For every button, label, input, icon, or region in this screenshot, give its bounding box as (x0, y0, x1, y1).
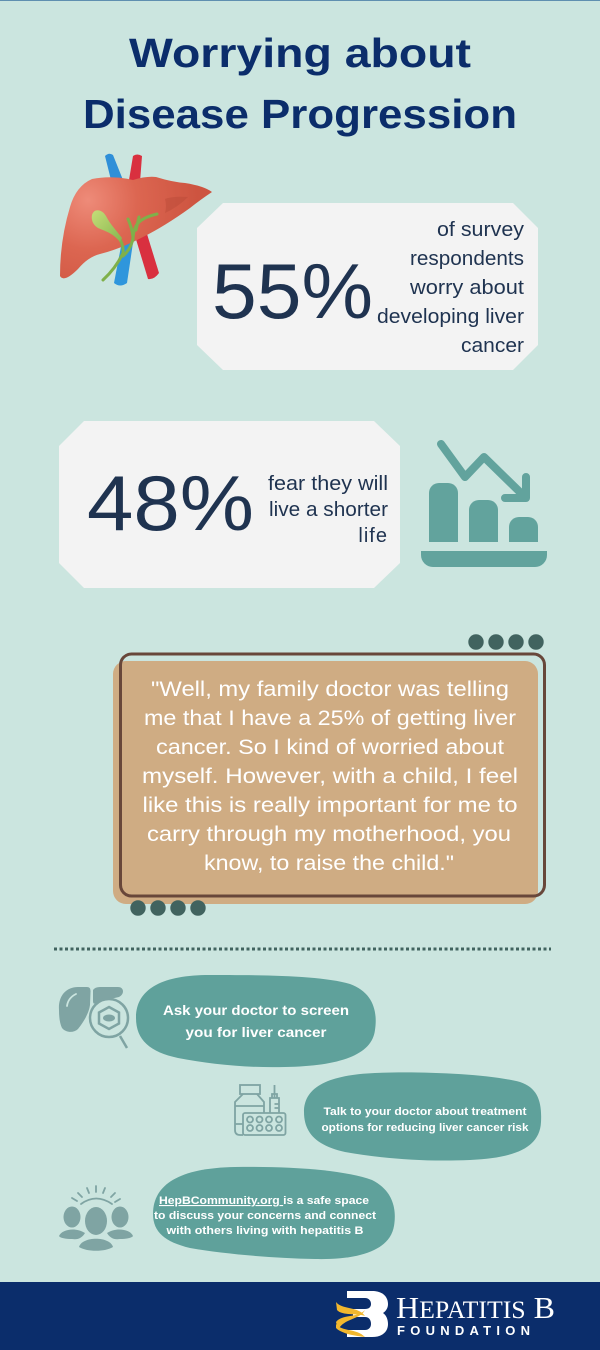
55% description: worry about (409, 277, 524, 299)
quote text: myself. However, with a child, I feel (142, 765, 518, 788)
panel: patient quote (113, 634, 544, 916)
logo: Hepatitis B Foundation: HEPATITIS B (396, 1290, 555, 1325)
title: Disease Progression (83, 91, 517, 137)
bubble: screening: Ask your doctor to screen (163, 1003, 349, 1018)
55% description: of survey (437, 219, 524, 241)
48% description (268, 473, 388, 547)
48% description: fear they will (268, 473, 388, 495)
quote text: carry through my motherhood, you (147, 823, 511, 846)
bubble: community (153, 1167, 395, 1259)
icon: liver with magnifier (59, 987, 128, 1048)
55% description: developing liver (377, 306, 524, 328)
icon: community group (59, 1186, 133, 1251)
title (83, 30, 517, 137)
bubble: community: with others living with hepatitis B (165, 1225, 364, 1237)
footer band (0, 1282, 600, 1350)
48% description: life (358, 525, 388, 547)
quote text (142, 678, 518, 875)
dots: bottom left (130, 900, 206, 916)
quote text: "Well, my family doctor was telling (151, 678, 509, 701)
48% description: live a shorter (269, 499, 388, 521)
logo: Hepatitis B Foundation (336, 1290, 555, 1338)
icon: medication (235, 1085, 286, 1135)
quote box outline (120, 654, 544, 896)
55% description: cancer (461, 335, 524, 357)
bubble: community: to discuss your concerns and connect (154, 1210, 376, 1222)
quote box fill (113, 661, 538, 904)
48% figure: 48% (87, 459, 254, 547)
bubble: treatment (304, 1072, 541, 1161)
55% description (377, 219, 524, 357)
panel: 48% stat (59, 421, 400, 588)
icon: declining bar chart (421, 444, 547, 567)
panel: 55% stat (197, 203, 538, 370)
title: Worrying about (129, 30, 471, 76)
bubble: community: HepBCommunity.org is a safe space (159, 1195, 369, 1207)
quote text: like this is really important for me to (142, 794, 518, 817)
bubble: treatment: Talk to your doctor about treatment (324, 1106, 527, 1118)
quote text: know, to raise the child." (204, 852, 454, 875)
55% description: respondents (410, 248, 524, 270)
icon: liver (60, 154, 212, 286)
quote text: cancer. So I kind of worried about (156, 736, 504, 759)
quote text: me that I have a 25% of getting liver (144, 707, 516, 730)
bubble: screening: you for liver cancer (186, 1025, 327, 1040)
dots: top right (468, 634, 544, 650)
bubble: screening (136, 975, 376, 1067)
logo: Hepatitis B Foundation: FOUNDATION (397, 1323, 530, 1338)
bubble: treatment: options for reducing liver cancer risk (322, 1122, 529, 1134)
55% figure: 55% (212, 247, 373, 335)
